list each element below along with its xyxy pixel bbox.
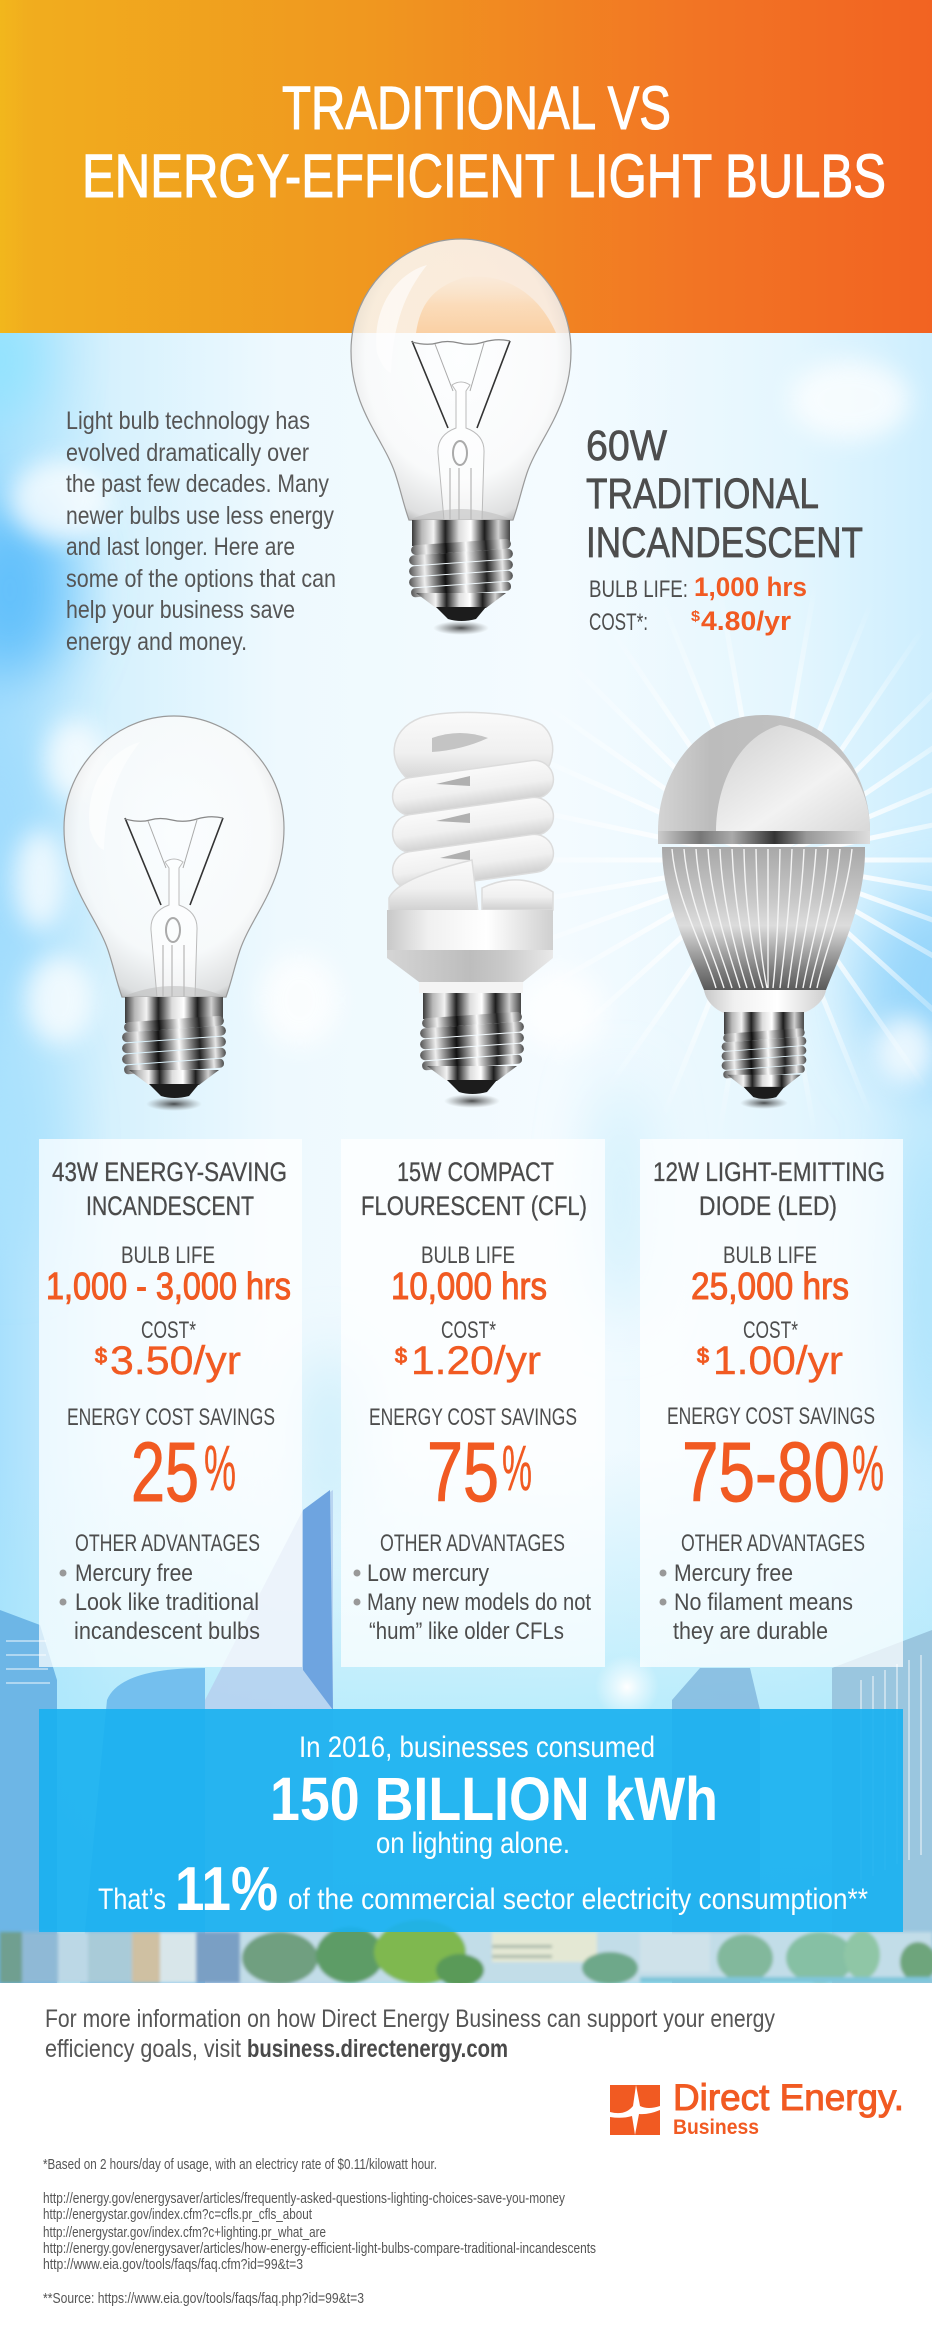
60W traditional label: TRADITIONAL xyxy=(586,470,819,518)
panel: 43W energy-saving incandescent xyxy=(39,1139,302,1667)
panel: 12W light-emitting diode: No filament means xyxy=(674,1589,853,1616)
panel: 12W light-emitting diode: Mercury free xyxy=(674,1560,793,1587)
panel: 12W light-emitting diode: $ xyxy=(697,1345,709,1368)
60W traditional label: BULB LIFE: xyxy=(589,576,688,603)
callout: lighting consumption: of the commercial sector electricity consumption** xyxy=(288,1883,868,1916)
callout: lighting consumption: In 2016, businesses consumed xyxy=(299,1731,655,1764)
panel: 43W energy-saving incandescent: % xyxy=(204,1432,236,1504)
intro paragraph: help your business save xyxy=(66,596,295,624)
panel: 15W compact fluorescent: $ xyxy=(395,1345,407,1368)
60W traditional label: $ xyxy=(691,608,701,625)
panel: 12W light-emitting diode: BULB LIFE xyxy=(723,1242,817,1269)
panel: 15W compact fluorescent: 15W COMPACT xyxy=(397,1157,554,1187)
icon: traditional 60W bulb xyxy=(351,239,571,635)
callout: lighting consumption xyxy=(39,1709,903,1932)
title xyxy=(82,74,886,210)
panel: 15W compact fluorescent: Many new models do not xyxy=(367,1589,591,1616)
footnotes and sources: *Based on 2 hours/day of usage, with an electricy rate of $0.11/kilowatt hour. xyxy=(43,2156,437,2173)
panel: 15W compact fluorescent: 75 xyxy=(427,1425,499,1519)
60W traditional label: 60W xyxy=(586,422,667,470)
title: TRADITIONAL VS xyxy=(282,74,671,142)
panel: 43W energy-saving incandescent: incandescent bulbs xyxy=(74,1618,260,1645)
footnotes and sources: http://energy.gov/energysaver/articles/frequently-asked-questions-lighting-choices-save-you-money xyxy=(43,2190,565,2207)
panel: 43W energy-saving incandescent: 1,000 - 3,000 hrs xyxy=(46,1266,291,1308)
footnotes and sources xyxy=(43,2156,596,2307)
panel: 15W compact fluorescent: OTHER ADVANTAGES xyxy=(380,1530,565,1557)
intro paragraph: the past few decades. Many xyxy=(66,470,329,498)
panel: 12W light-emitting diode: % xyxy=(852,1432,884,1504)
footnotes and sources: http://www.eia.gov/tools/faqs/faq.cfm?id=99&t=3 xyxy=(43,2256,303,2273)
panel: 15W compact fluorescent: FLOURESCENT (CFL) xyxy=(361,1191,587,1221)
panel: 43W energy-saving incandescent: COST* xyxy=(141,1317,196,1344)
panel: 15W compact fluorescent xyxy=(341,1139,605,1667)
intro paragraph: and last longer. Here are xyxy=(66,533,295,561)
intro paragraph: Light bulb technology has xyxy=(66,407,310,435)
icon: compact fluorescent bulb xyxy=(387,712,556,1108)
footnotes and sources: http://energystar.gov/index.cfm?c=cfls.pr_cfls_about xyxy=(43,2206,313,2223)
logo: Direct Energy Business xyxy=(610,2077,904,2139)
panel: 43W energy-saving incandescent: 25 xyxy=(131,1425,199,1519)
panel: 15W compact fluorescent: 10,000 hrs xyxy=(391,1266,547,1308)
logo: Direct Energy Business: Direct Energy. xyxy=(673,2077,904,2118)
panel: 15W compact fluorescent: “hum” like older CFLs xyxy=(369,1618,564,1645)
call to action text xyxy=(45,2005,775,2063)
panel: 12W light-emitting diode xyxy=(640,1139,903,1667)
panel: 12W light-emitting diode: OTHER ADVANTAGES xyxy=(681,1530,865,1557)
header band xyxy=(0,0,932,333)
intro paragraph: energy and money. xyxy=(66,628,247,656)
panel: 43W energy-saving incandescent: 43W ENERGY-SAVING xyxy=(52,1157,287,1187)
panel: 43W energy-saving incandescent: 3.50/yr xyxy=(110,1339,241,1383)
panel: 43W energy-saving incandescent: INCANDESCENT xyxy=(86,1191,254,1221)
footnotes and sources: http://energy.gov/energysaver/articles/how-energy-efficient-light-bulbs-compare-traditional-incandescents xyxy=(43,2240,596,2257)
callout: lighting consumption: 11% xyxy=(175,1855,278,1924)
panel: 43W energy-saving incandescent: $ xyxy=(95,1345,107,1368)
intro paragraph: newer bulbs use less energy xyxy=(66,502,334,530)
callout: lighting consumption: on lighting alone. xyxy=(376,1827,570,1860)
icon: LED bulb xyxy=(658,715,870,1109)
intro paragraph: some of the options that can xyxy=(66,565,336,593)
call to action text: business.directenergy.com xyxy=(247,2035,508,2063)
panel: 15W compact fluorescent: Low mercury xyxy=(367,1560,489,1587)
panel: 12W light-emitting diode: COST* xyxy=(743,1317,798,1344)
panel: 12W light-emitting diode: 12W LIGHT-EMITTING xyxy=(653,1157,885,1187)
sun flare xyxy=(600,1660,654,1709)
intro paragraph xyxy=(66,407,336,656)
panel: 12W light-emitting diode: DIODE (LED) xyxy=(699,1191,837,1221)
panel: 12W light-emitting diode: 25,000 hrs xyxy=(691,1266,849,1308)
panel: 43W energy-saving incandescent: BULB LIFE xyxy=(121,1242,215,1269)
60W traditional label: INCANDESCENT xyxy=(586,519,863,567)
callout: lighting consumption: 150 BILLION kWh xyxy=(270,1765,718,1833)
callout: lighting consumption: That’s xyxy=(98,1883,166,1916)
panel: 43W energy-saving incandescent: ENERGY COST SAVINGS xyxy=(67,1404,275,1431)
background: sky with bokeh and city xyxy=(0,300,932,1986)
panel: 15W compact fluorescent: ENERGY COST SAVINGS xyxy=(369,1404,577,1431)
panel: 43W energy-saving incandescent: OTHER ADVANTAGES xyxy=(75,1530,260,1557)
sun rays behind LED bulb xyxy=(477,574,932,1146)
panel: 15W compact fluorescent: % xyxy=(502,1432,532,1504)
call to action text: For more information on how Direct Energy Business can support your energy xyxy=(45,2005,775,2033)
panel: 15W compact fluorescent: COST* xyxy=(441,1317,496,1344)
icon: energy-saving incandescent bulb xyxy=(64,716,284,1111)
60W traditional label xyxy=(586,422,863,636)
panel: 12W light-emitting diode: 1.00/yr xyxy=(713,1339,843,1383)
panel: 43W energy-saving incandescent: Look like traditional xyxy=(75,1589,259,1616)
60W traditional label: 4.80/yr xyxy=(701,606,792,636)
footnotes and sources: http://energystar.gov/index.cfm?c+lighting.pr_what_are xyxy=(43,2224,326,2241)
panel: 12W light-emitting diode: 75-80 xyxy=(682,1425,850,1519)
panel: 15W compact fluorescent: 1.20/yr xyxy=(411,1339,541,1383)
intro paragraph: evolved dramatically over xyxy=(66,439,309,467)
panel: 43W energy-saving incandescent: Mercury free xyxy=(75,1560,193,1587)
logo: Direct Energy Business: Business xyxy=(673,2116,759,2139)
panel: 15W compact fluorescent: BULB LIFE xyxy=(421,1242,515,1269)
city skyline xyxy=(0,1490,932,1986)
footnotes and sources: **Source: https://www.eia.gov/tools/faqs/faq.php?id=99&t=3 xyxy=(43,2290,364,2307)
call to action text: efficiency goals, visit xyxy=(45,2035,241,2063)
60W traditional label: COST*: xyxy=(589,609,648,636)
60W traditional label: 1,000 hrs xyxy=(694,572,807,602)
panel: 12W light-emitting diode: they are durable xyxy=(673,1618,828,1645)
